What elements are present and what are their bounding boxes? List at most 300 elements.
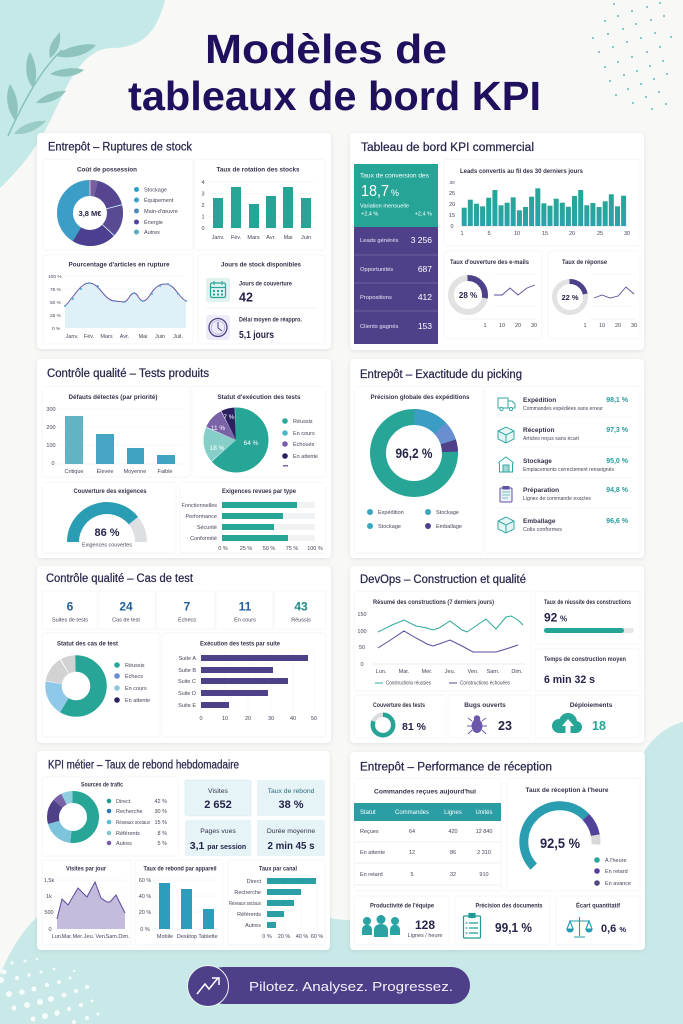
list: précision par étape: Emplacements correctement renseignés	[523, 467, 614, 473]
bar chart: leads convertis: 10	[514, 231, 520, 237]
panel: funnel purple: Leads générés	[360, 238, 398, 244]
bar chart: défauts détectés: Moyenne	[124, 469, 146, 475]
kpi tile: durée moyenne: Durée moyenne	[267, 828, 315, 835]
donut chart: sources de trafic	[42, 777, 178, 856]
table: commandes reçues: 5	[410, 872, 414, 878]
pie chart: statut d'exécution: 7 %	[223, 414, 235, 421]
donut chart: statut des cas de test: Réussis	[125, 663, 145, 669]
decorative dots top right	[592, 2, 672, 110]
donut chart: sources de trafic: Référents	[116, 831, 140, 837]
donut chart: coût de possession: Stockage	[144, 188, 167, 194]
kpi: précision documents: 99,1 %	[495, 920, 532, 935]
donut chart: sources de trafic: Autres	[116, 841, 132, 847]
bar chart: rebond par appareil: Mobile	[157, 934, 173, 940]
kpi tiles: En cours	[234, 618, 256, 624]
area chart: pourcentage en rupture: Avr.	[120, 334, 130, 340]
pie chart: statut d'exécution: En cours	[293, 431, 315, 437]
list: précision par étape: Articles reçus sans écart	[523, 436, 579, 442]
bar chart: exécution par suite: Suite D	[178, 691, 196, 697]
bar chart: taux par canal: Réseaux sociaux	[229, 901, 261, 907]
kpi: taux de réponse: 20	[615, 323, 621, 329]
line chart: résumé des constructions: Résumé des constructions (7 derniers jours)	[373, 599, 494, 606]
icon: leaf sprig	[7, 32, 96, 136]
pie chart: statut d'exécution: Statut d'exécution des tests	[218, 394, 301, 401]
kpi tiles: Échecs	[178, 616, 196, 624]
list: précision par étape: Emballage	[523, 518, 556, 525]
bar chart: défauts détectés: Défauts détectés (par priorité)	[68, 394, 158, 401]
bar chart: défauts détectés: Élevée	[97, 468, 113, 475]
bar chart: exécution par suite: 40	[290, 716, 296, 722]
bar chart: exécution par suite	[162, 633, 326, 737]
bar chart: défauts détectés: 0	[51, 461, 55, 467]
table: commandes reçues: Reçues	[360, 829, 379, 835]
table: commandes reçues: 12 840	[476, 829, 492, 835]
line chart: résumé des constructions: 0	[360, 662, 364, 668]
kpi: déploiements	[535, 695, 640, 738]
bar chart: leads convertis: 15	[449, 213, 455, 219]
area chart: pourcentage en rupture: Pourcentage d'articles en rupture	[68, 262, 170, 268]
bar chart: leads convertis: 20	[449, 202, 455, 208]
donut chart: sources de trafic: Recherche	[116, 809, 143, 815]
line chart: résumé des constructions: Mer.	[422, 669, 433, 675]
bar chart: taux par canal: Référents	[237, 912, 261, 918]
bar chart: taux de rotation: Juin	[301, 235, 311, 241]
donut chart: coût de possession	[43, 159, 193, 250]
list: précision par étape: Colis conformes	[523, 527, 562, 533]
area chart: visites par jour: Sam.	[106, 934, 119, 940]
bar chart: leads convertis: 15	[542, 231, 548, 237]
donut chart: précision globale: Stockage	[436, 510, 459, 516]
donut chart: sources de trafic: 8 %	[158, 831, 167, 837]
donut chart: statut des cas de test: En attente	[125, 698, 150, 704]
panel: KPI métier	[37, 751, 330, 950]
list: précision par étape: 97,3 %	[606, 427, 629, 434]
icon: trend arrow	[197, 978, 219, 994]
kpi tile: visites	[185, 780, 251, 816]
bar chart: défauts détectés	[42, 386, 190, 477]
kpi tiles: 11	[239, 600, 252, 614]
bar chart: exécution par suite: 30	[268, 716, 274, 722]
donut chart: sources de trafic: 30 %	[154, 809, 167, 815]
kpi: productivité: Productivité de l'équipe	[370, 902, 434, 910]
panel: funnel purple: 412	[418, 292, 432, 302]
donut chart: sources de trafic: 5 %	[158, 841, 167, 847]
kpi: bugs ouverts	[448, 695, 531, 738]
gauge: taux de réception: Taux de réception à l'heure	[526, 787, 609, 794]
panel: conversion teal	[354, 164, 438, 227]
table: commandes reçues	[354, 778, 501, 891]
panel title: Entrepôt – Exactitude du picking	[360, 369, 522, 381]
area chart: visites par jour: Mar.	[62, 934, 73, 940]
bar chart: taux de rotation: 3	[201, 192, 205, 198]
kpi tile: durée moyenne	[257, 820, 325, 856]
gauge: couverture des exigences: Exigences couvertes	[82, 542, 132, 548]
bar chart: taux de rotation: 4	[201, 180, 205, 186]
background blob: top left	[0, 0, 165, 188]
line chart: résumé des constructions	[354, 591, 531, 691]
donut chart: précision globale: Stockage	[378, 524, 401, 530]
area chart: visites par jour: Ven.	[95, 934, 107, 940]
bar chart: défauts détectés: 100	[46, 443, 56, 449]
table: commandes reçues: Lignes	[444, 810, 462, 816]
area chart: pourcentage en rupture: Juil.	[173, 334, 183, 340]
kpi tile: durée moyenne: 2 min 45 s	[268, 840, 315, 852]
bar chart: exigences revues: 50 %	[263, 546, 275, 552]
pie chart: statut d'exécution: Réussis	[293, 419, 313, 425]
panel title: Tableau de bord KPI commercial	[361, 142, 534, 154]
kpi tiles: Cas de test	[112, 618, 140, 624]
bar chart: leads convertis	[444, 159, 640, 246]
slogan pill: Pilotez. Analysez. Progressez.	[249, 979, 453, 994]
bar chart: exigences revues: Sécurité	[197, 525, 217, 531]
panel: Exactitude du picking	[350, 359, 644, 558]
kpi: productivité: 128	[415, 918, 435, 932]
kpi: taux d'ouverture: Taux d'ouverture des e-mails	[450, 259, 529, 266]
list: précision par étape: Lignes de commande exactes	[523, 496, 591, 502]
gauge: couverture des exigences: 86 %	[94, 527, 120, 539]
bar chart: exigences revues: Performance	[186, 514, 217, 520]
gauge: taux de réception: À l'heure	[605, 857, 627, 864]
donut chart: coût de possession: Autres	[144, 230, 160, 236]
kpi: taux de réponse: 22 %	[561, 293, 579, 302]
area chart: pourcentage en rupture: Mars	[100, 334, 113, 340]
kpi: déploiements: Déploiements	[570, 702, 613, 709]
list: précision par étape: 96,6 %	[606, 518, 629, 525]
bar chart: rebond par appareil: 0 %	[140, 927, 150, 933]
bar chart: exécution par suite: Suite A	[179, 656, 196, 662]
area chart: pourcentage en rupture: Janv.	[66, 334, 79, 340]
list: précision par étape: 94,8 %	[606, 487, 629, 494]
panel: Contrôle qualité cas de test	[37, 566, 331, 743]
line chart: résumé des constructions: Constructions échouées	[460, 680, 510, 686]
bar chart: défauts détectés: 200	[46, 425, 56, 431]
table: commandes reçues: Commandes	[395, 810, 429, 816]
panel title: DevOps – Construction et qualité	[360, 574, 526, 586]
area chart: pourcentage en rupture: 0 %	[52, 326, 61, 332]
bar chart: exécution par suite: Suite B	[178, 668, 196, 674]
area chart: visites par jour	[42, 860, 131, 945]
donut chart: coût de possession: Énergie	[144, 219, 163, 226]
table: commandes reçues: 2 310	[477, 850, 491, 856]
bar chart: leads convertis: 0	[450, 224, 454, 230]
table: commandes reçues: Unités	[475, 810, 493, 816]
icon: truck	[498, 398, 515, 411]
donut chart: sources de trafic: Direct	[116, 799, 131, 805]
panel: funnel purple: Propositions	[360, 295, 392, 301]
bar chart: taux de rotation: 2	[201, 203, 205, 209]
kpi: taux de réussite: %	[560, 614, 567, 624]
pie chart: statut d'exécution	[192, 386, 326, 477]
list: précision par étape: Préparation	[523, 487, 559, 494]
bar chart: taux de rotation	[194, 159, 325, 250]
kpi: couverture des tests: 81 %	[402, 721, 427, 733]
gauge: taux de réception: 92,5 %	[540, 835, 580, 851]
kpi: taux de réponse: 10	[599, 323, 605, 329]
panel: Contrôle qualité tests produits	[37, 359, 331, 558]
bar chart: taux par canal	[228, 860, 325, 945]
panel: jours de stock disponibles: Jours de stock disponibles	[221, 262, 301, 268]
icon: calendar	[206, 278, 230, 302]
bar chart: exécution par suite: Suite C	[178, 679, 196, 685]
donut chart: précision globale: 96,2 %	[396, 445, 433, 461]
donut chart: sources de trafic: 42 %	[154, 799, 167, 805]
area chart: pourcentage en rupture: 25 %	[50, 313, 62, 319]
kpi tiles: 24	[119, 600, 133, 614]
kpi: écart quantitatif: 0,6 %	[601, 923, 626, 935]
bar chart: défauts détectés: 300	[46, 407, 56, 413]
bar chart: exécution par suite: Suite E	[178, 703, 196, 709]
kpi: écart quantitatif: Écart quantitatif	[576, 900, 621, 910]
donut chart: coût de possession: Main-d'œuvre	[144, 209, 178, 215]
donut chart: coût de possession: Coût de possession	[77, 166, 137, 174]
kpi tiles: Réussis	[291, 618, 311, 624]
kpi: taux de réussite: 92	[544, 610, 558, 624]
list: précision par étape: Commandes expédiées sans erreur	[523, 406, 603, 412]
bar chart: exécution par suite: 0	[199, 716, 203, 722]
kpi: taux d'ouverture: 10	[499, 323, 505, 329]
pie chart: statut d'exécution: Échoués	[293, 441, 315, 448]
main title: tableaux de bord KPI	[128, 73, 541, 119]
pie chart: statut d'exécution: 18 %	[210, 445, 225, 452]
decorative dots bottom left	[0, 958, 100, 1024]
kpi: taux de réponse: 30	[631, 323, 637, 329]
area chart: pourcentage en rupture: 100 %	[48, 274, 62, 280]
gauge: taux de réception: En retard	[605, 869, 628, 875]
table: commandes reçues: 32	[450, 872, 456, 878]
line chart: résumé des constructions: Lun.	[376, 669, 387, 675]
bar chart: taux de rotation: Avr.	[266, 235, 276, 241]
list: précision par étape	[485, 386, 640, 553]
bar chart: leads convertis: Leads convertis au fil des 30 derniers jours	[460, 168, 583, 175]
bar chart: taux de rotation: Fév.	[231, 235, 242, 241]
main title	[128, 26, 541, 119]
bar chart: leads convertis: 20	[569, 231, 575, 237]
bar chart: défauts détectés: Critique	[65, 469, 83, 475]
area chart: visites par jour: 500	[44, 910, 54, 916]
bar chart: taux de rotation: Mai	[284, 235, 292, 241]
kpi: temps de construction: Temps de construction moyen	[544, 656, 626, 663]
area chart: pourcentage en rupture: Fév.	[84, 334, 95, 340]
kpi tile: pages vues: 3,1 par session	[190, 840, 246, 852]
panel: funnel purple: Clients gagnés	[360, 324, 398, 330]
pie chart: statut d'exécution: 64 %	[244, 440, 259, 447]
bar chart: exigences revues: 25 %	[240, 546, 252, 552]
area chart: pourcentage en rupture: Juin	[155, 334, 165, 340]
kpi tile: pages vues: Pages vues	[200, 828, 236, 835]
panel: conversion teal: +2,4 %	[361, 212, 378, 218]
panel: funnel purple: 3 256	[411, 235, 432, 245]
kpi: taux d'ouverture: 20	[515, 323, 521, 329]
donut chart: statut des cas de test: En cours	[125, 686, 147, 692]
kpi tiles: 6	[67, 600, 74, 614]
bar chart: taux par canal: Taux par canal	[259, 866, 297, 872]
list: précision par étape: 95,0 %	[606, 458, 629, 465]
area chart: visites par jour: Jeu.	[84, 934, 95, 940]
kpi: déploiements: 18	[592, 719, 606, 733]
icon: clipboard	[500, 486, 512, 502]
bar chart: leads convertis: 30	[624, 231, 630, 237]
bar chart: exécution par suite: 20	[245, 716, 251, 722]
pie chart: statut d'exécution: En attente	[293, 454, 318, 460]
line chart: résumé des constructions: 150	[357, 612, 367, 618]
line chart: résumé des constructions: 50	[359, 645, 365, 651]
bar chart: taux de rotation: Janv.	[212, 235, 225, 241]
panel title: Entrepôt – Performance de réception	[360, 762, 552, 774]
table: commandes reçues: Statut	[360, 810, 376, 816]
line chart: résumé des constructions: Ven.	[467, 669, 479, 675]
donut chart: précision globale	[354, 386, 483, 553]
bar chart: rebond par appareil: 60 %	[139, 878, 151, 884]
bar chart: exigences revues: Conformité	[190, 536, 217, 542]
kpi tile: taux de rebond: 38 %	[278, 799, 304, 811]
panel: funnel purple: 153	[418, 321, 432, 331]
bar chart: leads convertis: 30	[449, 180, 455, 186]
panel title: Contrôle qualité – Cas de test	[46, 573, 194, 585]
panel: conversion teal: +2,4 %	[415, 212, 432, 218]
bar chart: taux par canal: 0 %	[262, 934, 272, 940]
area chart: visites par jour: Mer.	[73, 934, 84, 940]
kpi: taux de réussite: Taux de réussite des constructions	[544, 599, 631, 606]
donut chart: statut des cas de test: Statut des cas de test	[57, 640, 119, 648]
panel: jours de stock disponibles: Délai moyen de réappro.	[239, 318, 302, 324]
list: précision par étape: Réception	[523, 427, 554, 434]
bar chart: taux de rotation: 0	[201, 226, 205, 232]
kpi: taux de réponse: Taux de réponse	[562, 259, 607, 266]
bar chart: taux par canal: 20 %	[278, 934, 290, 940]
bar chart: rebond par appareil: 20 %	[139, 910, 151, 916]
kpi: bugs ouverts: 23	[498, 719, 512, 733]
kpi tile: taux de rebond	[257, 780, 325, 816]
table: commandes reçues: 420	[448, 829, 458, 835]
panel: DevOps	[350, 566, 644, 743]
icon: cloud upload	[552, 713, 582, 733]
donut chart: sources de trafic: Réseaux sociaux	[116, 820, 150, 826]
bar chart: taux de rotation: Taux de rotation des stocks	[216, 166, 300, 174]
table: commandes reçues: En attente	[360, 850, 385, 856]
bar chart: taux par canal: Autres	[245, 923, 261, 929]
kpi: taux d'ouverture: 28 %	[459, 291, 477, 300]
area chart: visites par jour: 1k	[46, 894, 52, 900]
donut chart: statut des cas de test: Échecs	[125, 673, 143, 680]
area chart: pourcentage en rupture	[43, 255, 193, 344]
panel: jours de stock disponibles: Jours de couverture	[239, 282, 293, 288]
kpi tiles	[42, 591, 326, 629]
kpi: précision documents: Précision des documents	[476, 902, 543, 910]
kpi: productivité: Lignes / heure	[408, 933, 442, 939]
gauge: taux de réception: En avance	[605, 881, 631, 887]
kpi: taux d'ouverture: 30	[531, 323, 537, 329]
bar chart: exigences revues	[180, 482, 326, 553]
bar chart: exigences revues: Exigences revues par type	[222, 488, 296, 495]
kpi: productivité	[354, 896, 449, 945]
area chart: visites par jour: 0	[48, 927, 52, 933]
line chart: résumé des constructions: Dim.	[511, 669, 523, 675]
kpi tile: pages vues	[185, 820, 251, 856]
icon: bug	[467, 716, 487, 734]
bar chart: taux par canal: Direct	[247, 879, 261, 885]
bar chart: exécution par suite: 50	[311, 716, 317, 722]
bar chart: exigences revues: Fonctionnelles	[182, 503, 217, 509]
bar chart: rebond par appareil	[135, 860, 223, 945]
kpi tiles: Suites de tests	[52, 618, 88, 624]
area chart: visites par jour: 1,5k	[44, 878, 54, 884]
panel title: Contrôle qualité – Tests produits	[47, 368, 209, 380]
panel: jours de stock disponibles	[198, 255, 325, 344]
bar chart: taux de rotation: 1	[201, 214, 205, 220]
bar chart: rebond par appareil: Tablette	[198, 934, 218, 940]
icon: clock	[206, 315, 230, 340]
line chart: résumé des constructions: Sam.	[487, 669, 500, 675]
bar chart: exécution par suite: 10	[222, 716, 228, 722]
kpi tile: visites: Visites	[208, 788, 229, 795]
line chart: résumé des constructions: Mar.	[399, 669, 410, 675]
slogan pill	[188, 966, 470, 1006]
bar chart: leads convertis: 25	[597, 231, 603, 237]
line chart: résumé des constructions: Constructions réussies	[386, 680, 431, 686]
table: commandes reçues: 64	[409, 829, 415, 835]
bar chart: exigences revues: 75 %	[286, 546, 298, 552]
table: commandes reçues: 12	[409, 850, 415, 856]
icon: scales	[567, 917, 592, 937]
gauge: taux de réception	[507, 778, 640, 891]
bar chart: taux par canal: 40 %	[296, 934, 308, 940]
panel title: Entrepôt – Ruptures de stock	[48, 142, 192, 154]
panel: jours de stock disponibles: 5,1 jours	[239, 329, 274, 341]
panel: jours de stock disponibles: 42	[239, 290, 253, 304]
icon: box	[498, 427, 514, 443]
table: commandes reçues: 910	[479, 872, 489, 878]
panel: funnel purple: 687	[418, 264, 432, 274]
bar chart: rebond par appareil: Desktop	[177, 934, 197, 940]
kpi: écart quantitatif	[556, 896, 640, 945]
area chart: visites par jour: Visites par jour	[66, 866, 106, 872]
list: précision par étape: 98,1 %	[606, 397, 629, 404]
kpi: taux de réponse: 1	[583, 323, 587, 329]
kpi: taux d'ouverture	[444, 251, 542, 339]
donut chart: coût de possession: Équipement	[144, 197, 174, 204]
kpi: temps de construction: 6 min 32 s	[544, 674, 595, 686]
area chart: visites par jour: Lun.	[52, 934, 63, 940]
table: commandes reçues: Commandes reçues aujourd'hui	[374, 788, 476, 796]
donut chart: coût de possession: 3,8 M€	[79, 209, 102, 218]
gauge: couverture des exigences: Couverture des exigences	[74, 488, 147, 495]
panel: Tableau de bord KPI commercial	[350, 133, 644, 350]
kpi: couverture des tests: Couverture des tests	[373, 702, 425, 709]
line chart: résumé des constructions: 100	[357, 629, 367, 635]
gauge: couverture des exigences	[42, 482, 176, 553]
kpi tiles: 43	[294, 600, 308, 614]
bar chart: taux par canal: 60 %	[311, 934, 323, 940]
kpi: bugs ouverts: Bugs ouverts	[464, 702, 506, 709]
donut chart: précision globale: Précision globale des expéditions	[370, 394, 470, 401]
area chart: pourcentage en rupture: Mai	[139, 334, 147, 340]
bar chart: leads convertis: 25	[449, 191, 455, 197]
donut chart: sources de trafic: Sources de trafic	[81, 782, 123, 788]
panel: Entrepôt ruptures de stock	[37, 133, 331, 349]
kpi: couverture des tests	[354, 695, 445, 738]
area chart: pourcentage en rupture: 75 %	[50, 287, 62, 293]
bar chart: défauts détectés: Faible	[158, 469, 172, 475]
bar chart: rebond par appareil: 40 %	[139, 894, 151, 900]
list: précision par étape: Stockage	[523, 458, 552, 465]
panel: conversion teal: 18,7	[361, 183, 389, 200]
bar chart: exigences revues: 100 %	[307, 546, 323, 552]
area chart: pourcentage en rupture: 50 %	[50, 300, 62, 306]
panel: funnel purple: Opportunités	[360, 267, 393, 273]
icon: team	[362, 915, 400, 937]
panel: conversion teal: %	[391, 188, 399, 198]
kpi: taux de réussite	[535, 591, 640, 644]
